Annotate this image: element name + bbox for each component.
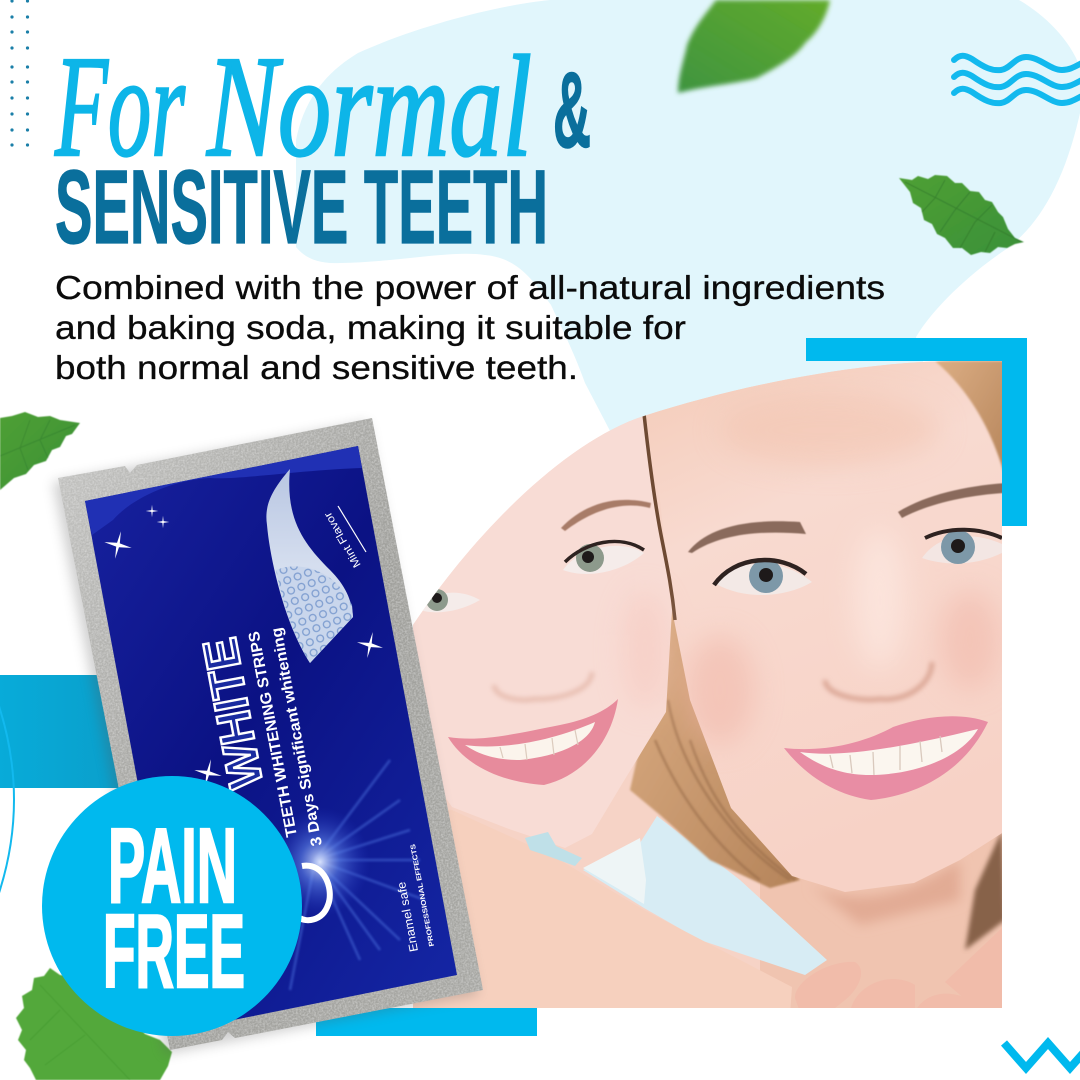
body text: both normal and sensitive teeth. xyxy=(55,349,578,386)
decorative ring arc xyxy=(0,703,14,896)
product: whitening strip sachet xyxy=(53,418,483,1054)
photo: woman's face xyxy=(644,361,1010,892)
icon: chevron logo xyxy=(1004,1043,1080,1068)
product: light band xyxy=(85,446,362,535)
title: for normal: For xyxy=(54,27,185,187)
icon: waves xyxy=(954,56,1080,103)
product: enamel safe label: Enamel safe xyxy=(394,880,421,953)
photo: woman's eyebrows xyxy=(688,483,1005,553)
panel: left teal band xyxy=(0,675,120,788)
photo: hair parting line xyxy=(644,414,675,620)
frame: cyan corner bracket xyxy=(806,338,1027,526)
decorative dot grid xyxy=(10,0,29,147)
photo: woman's mouth xyxy=(784,716,988,800)
product: rays xyxy=(290,760,425,990)
product: strip illustration xyxy=(266,469,353,663)
photo: woman's eyes xyxy=(714,530,1002,595)
title: for normal: Normal xyxy=(206,27,532,187)
product: claim: 3 Days Significant whitening xyxy=(268,626,326,847)
leaf: top blurred xyxy=(678,0,830,93)
photo: woman's nose xyxy=(825,662,932,700)
photo: face shading xyxy=(623,395,1000,745)
badge: pain free: PAIN xyxy=(108,807,237,925)
photo: child's mouth xyxy=(448,699,618,785)
photo: fingers xyxy=(964,997,978,1005)
leaf: bottom left xyxy=(16,968,172,1080)
photo: ribbon at child's collar xyxy=(525,832,582,866)
photo: child's eyes xyxy=(420,541,644,612)
product: professional effects label: PROFESSIONAL EFFECTS xyxy=(410,843,436,947)
product: tray icon xyxy=(300,866,330,920)
photo: child's eyebrows xyxy=(561,500,651,531)
product: sparkles xyxy=(101,505,386,790)
photo: blonde hair between faces xyxy=(630,600,800,888)
photo: shirt xyxy=(583,816,827,975)
badge: pain free xyxy=(42,776,302,1036)
photo: child's face xyxy=(405,405,672,848)
photo: child's arm xyxy=(680,928,792,1008)
leaf: left xyxy=(0,412,80,490)
photo: mother and daughter xyxy=(400,355,1010,1015)
product: flavor label: Mint Flavor xyxy=(322,509,364,570)
photo: woman's top-right hair xyxy=(935,361,1002,472)
photo: child's nose xyxy=(494,672,592,700)
photo: woman's neck and back hair xyxy=(760,833,1002,1008)
background blob xyxy=(296,0,1080,450)
body text xyxy=(55,269,885,386)
bar: bottom cyan xyxy=(316,1008,537,1036)
title: sensitive teeth: SENSITIVE TEETH xyxy=(55,149,548,266)
leaf: right xyxy=(899,175,1024,255)
body text: Combined with the power of all-natural ingredients xyxy=(55,269,885,306)
text: & xyxy=(553,49,591,170)
product: brand name: WHITE xyxy=(194,634,274,793)
badge: pain free: FREE xyxy=(103,894,245,1010)
title: for normal xyxy=(54,27,532,187)
body text: and baking soda, making it suitable for xyxy=(55,309,686,346)
product: strip label: TEETH WHITENING STRIPS xyxy=(246,630,301,838)
